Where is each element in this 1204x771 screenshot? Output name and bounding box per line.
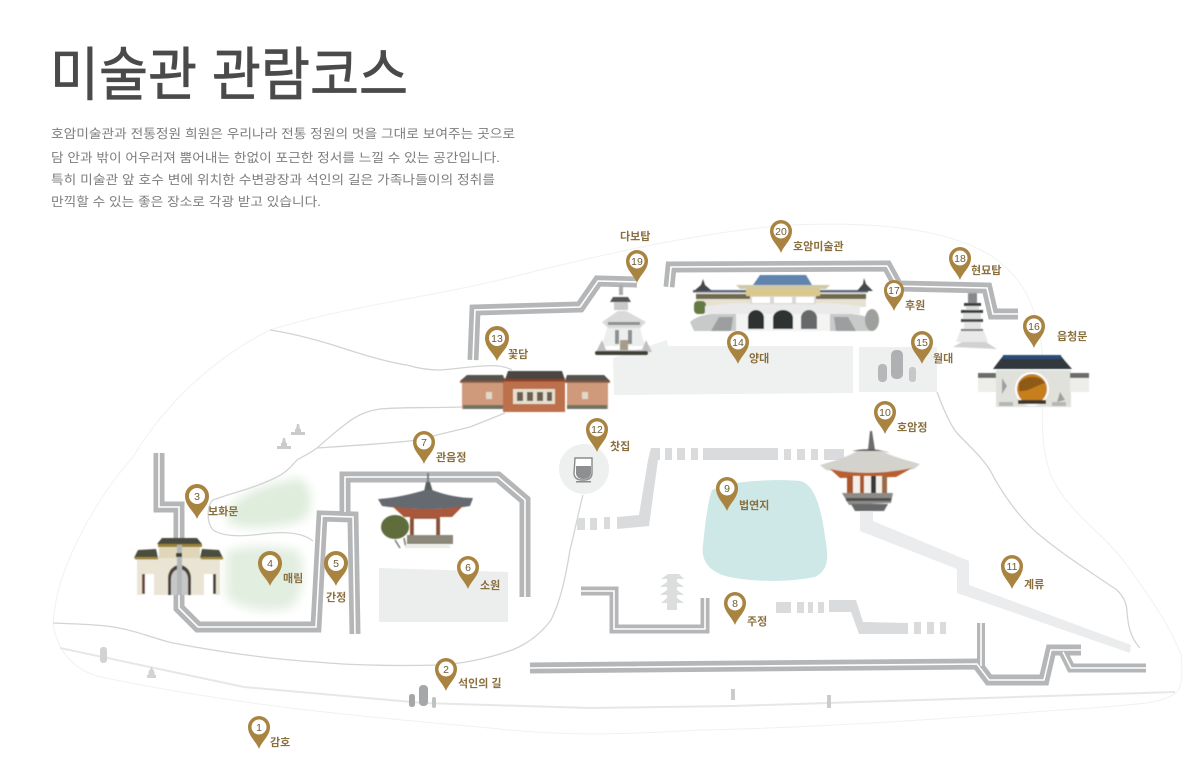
- pin 7: [413, 431, 466, 464]
- pin 16: 읍청문: [1057, 329, 1087, 343]
- pin 12: 찻집: [610, 439, 630, 453]
- intro text block: 담 안과 밖이 어우러져 뿜어내는 한없이 포근한 정서를 느낄 수 있는 공간입니다.: [51, 151, 500, 165]
- pin 18: 현묘탑: [971, 263, 1001, 277]
- pin 10: 10: [879, 407, 891, 419]
- pin 3: 보화문: [208, 504, 238, 518]
- title: 미술관 관람코스: [50, 43, 408, 108]
- woldae courtyard: [859, 347, 937, 392]
- pin 14: 양대: [749, 351, 769, 365]
- pin 6: 소원: [480, 578, 500, 592]
- pin 19: 다보탑: [620, 229, 650, 243]
- map base: [53, 224, 1182, 734]
- pin 17: [884, 280, 925, 312]
- pin 11: 계류: [1024, 577, 1044, 591]
- pin 2: [435, 658, 502, 691]
- pin 4: 4: [267, 558, 273, 570]
- pin 4: 매림: [283, 571, 303, 585]
- pin 17: 17: [888, 285, 900, 297]
- pin 20: 20: [775, 226, 787, 238]
- pin 9: 9: [724, 483, 730, 495]
- pin 19: [620, 229, 650, 283]
- pin 5: 간정: [326, 591, 346, 604]
- building: hoamjeong pavilion: [820, 431, 920, 511]
- pin 4: [258, 551, 303, 586]
- pin 18: 18: [954, 253, 966, 265]
- small stone pagoda: [660, 574, 684, 610]
- pin 18: [949, 247, 1001, 280]
- intro text block: 특히 미술관 앞 호수 변에 위치한 수변광장과 석인의 길은 가족나들이의 정취를: [51, 173, 495, 187]
- intro text block: 만끽할 수 있는 좋은 장소로 각광 받고 있습니다.: [51, 195, 321, 209]
- building: hyeonmyotap: [953, 293, 997, 349]
- teahouse circle with cup icon: [559, 444, 609, 494]
- pins and labels: [185, 220, 1087, 749]
- pin 8: [724, 592, 767, 628]
- building: flower wall: [460, 371, 610, 412]
- dashed light walkways: [577, 448, 946, 634]
- pin 19: 19: [631, 256, 643, 268]
- pin 17: 후원: [905, 298, 925, 312]
- building: bohwamun gate: [134, 538, 223, 595]
- pin 14: 14: [732, 337, 744, 349]
- intro text block: 호암미술관과 전통정원 희원은 우리나라 전통 정원의 멋을 그대로 보여주는 곳으로: [51, 127, 515, 141]
- pin 11: [1001, 555, 1044, 591]
- building: eupcheongmun gate: [978, 355, 1089, 407]
- building: hoam art museum: [690, 275, 879, 331]
- pin 10: 호암정: [897, 421, 927, 434]
- pin 10: [874, 401, 927, 434]
- building: gwaneumjeong pavilion: [378, 473, 473, 548]
- green grove upper: [228, 478, 311, 527]
- pin 13: [485, 326, 528, 361]
- pin 5: 5: [333, 558, 339, 570]
- pin 1: 감호: [270, 736, 290, 749]
- pin 9: [716, 477, 769, 512]
- pin 5: [324, 551, 348, 604]
- pin 13: 꽃담: [508, 348, 528, 361]
- yangdae courtyard: [613, 340, 853, 395]
- pin 7: 관음정: [436, 451, 466, 464]
- lotus pond: [703, 480, 827, 581]
- wall roads: [159, 266, 1146, 680]
- pin 1: 1: [256, 722, 262, 734]
- pin 6: 6: [465, 562, 471, 574]
- pin 3: 3: [194, 491, 200, 503]
- pin 6: [457, 556, 500, 592]
- pin 13: 13: [491, 333, 503, 345]
- pin 8: 8: [732, 598, 738, 610]
- pin 20: 호암미술관: [793, 240, 844, 253]
- site boundary: [53, 224, 1182, 734]
- stone figures and small towers: [100, 350, 916, 708]
- pin 11: 11: [1007, 561, 1018, 573]
- pin 20: [770, 220, 844, 253]
- intro text block: [51, 127, 515, 209]
- garden paths: [53, 330, 1140, 666]
- green grove lower: [226, 546, 303, 610]
- pin 7: 7: [421, 437, 427, 449]
- pin 16: [1023, 315, 1087, 348]
- pin 1: [248, 716, 290, 749]
- pin 12: [586, 418, 630, 453]
- pin 14: [727, 331, 769, 365]
- pin 9: 법연지: [739, 499, 769, 512]
- pin 2: 2: [443, 664, 449, 676]
- stream path: [860, 512, 1131, 653]
- pin 15: 월대: [933, 351, 953, 365]
- pin 16: 16: [1028, 321, 1040, 333]
- pin 3: [185, 484, 238, 519]
- soweon garden: [379, 568, 508, 622]
- pin 2: 석인의 길: [458, 677, 502, 690]
- building: dabotap pagoda: [595, 285, 652, 355]
- pin 8: 주정: [747, 615, 767, 628]
- pin 15: [911, 331, 953, 365]
- pin 12: 12: [591, 424, 603, 436]
- pin 15: 15: [916, 337, 928, 349]
